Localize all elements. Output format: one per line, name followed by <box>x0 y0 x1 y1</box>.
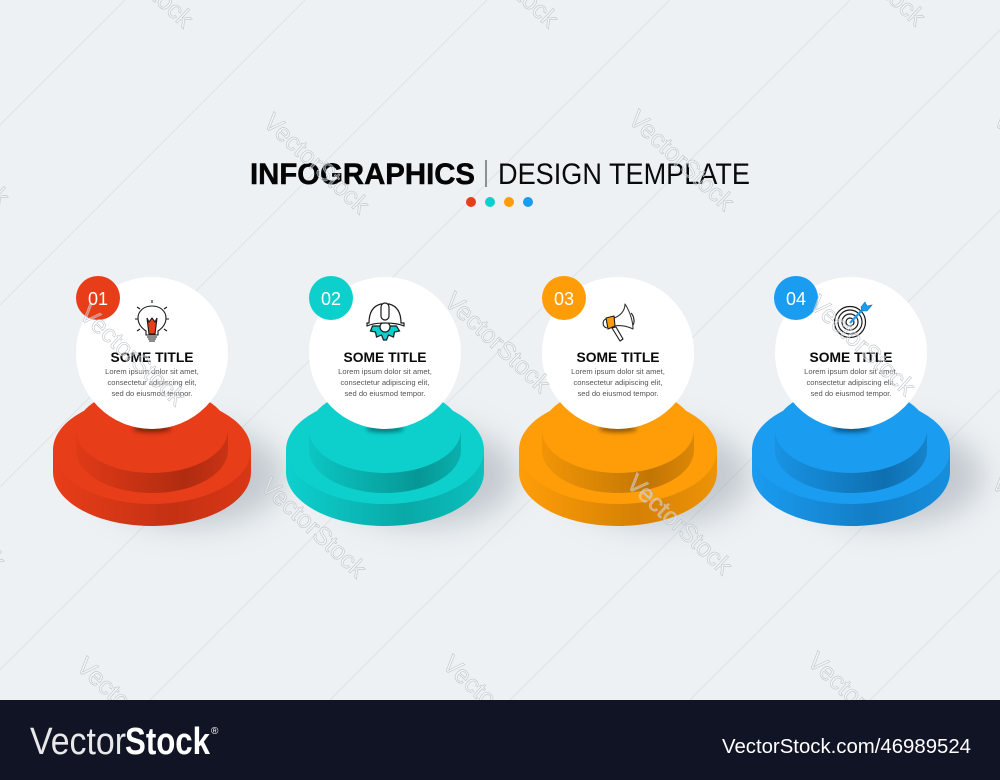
icon: target with arrow <box>834 302 872 338</box>
number badge <box>76 276 120 320</box>
title: INFOGRAPHICS <box>250 158 475 191</box>
number badge <box>309 276 353 320</box>
footer bar <box>0 700 1000 780</box>
number badge: 04 <box>786 289 806 309</box>
footer logo: ® <box>211 726 219 737</box>
number badge: 01 <box>88 289 108 309</box>
body text <box>338 367 432 398</box>
heading: SOME TITLE <box>576 349 660 365</box>
white circle <box>309 277 461 429</box>
body text <box>804 367 898 398</box>
white circle <box>542 277 694 429</box>
podium shadow <box>100 426 284 526</box>
icon: hard hat with gear <box>367 303 404 340</box>
number badge: 03 <box>554 289 574 309</box>
blue podium <box>752 387 950 526</box>
body text: consectetur adipiscing elit, <box>107 378 197 387</box>
red podium <box>53 387 251 526</box>
teal podium <box>286 387 484 526</box>
podium shadow <box>566 426 750 526</box>
number badge <box>774 276 818 320</box>
white circle <box>76 277 228 429</box>
heading: SOME TITLE <box>344 349 426 365</box>
footer logo: Stock <box>125 721 211 763</box>
body text: Lorem ipsum dolor sit amet, <box>804 367 898 376</box>
podium shadow <box>333 426 517 526</box>
title colour dots <box>466 197 533 207</box>
stock watermarks: VectorStock <box>74 300 191 412</box>
stock watermarks: VectorStock <box>623 105 740 217</box>
body text: Lorem ipsum dolor sit amet, <box>105 367 199 376</box>
stock watermarks: VectorStock <box>804 290 921 402</box>
body text: Lorem ipsum dolor sit amet, <box>338 367 432 376</box>
body text: sed do eiusmod tempor. <box>577 389 659 398</box>
orange podium <box>519 387 717 526</box>
white circle <box>775 277 927 429</box>
heading: SOME TITLE <box>110 349 194 365</box>
body text: consectetur adipiscing elit, <box>340 378 430 387</box>
icon: megaphone <box>603 304 634 341</box>
stock watermarks: VectorStock <box>621 469 738 581</box>
panel: step 02 <box>286 276 517 526</box>
footer image id: VectorStock.com/46989524 <box>722 736 971 758</box>
icon: light bulb <box>135 300 169 341</box>
stock watermarks: VectorStock <box>255 472 372 584</box>
body text <box>105 367 199 398</box>
body text: sed do eiusmod tempor. <box>344 389 426 398</box>
panel: step 01 <box>53 276 284 526</box>
title <box>250 158 750 191</box>
body text: sed do eiusmod tempor. <box>111 389 193 398</box>
stock watermarks: VectorStock <box>802 647 919 759</box>
stock watermarks: VectorStock <box>437 650 554 762</box>
body text: consectetur adipiscing elit, <box>573 378 663 387</box>
panel: step 04 <box>752 276 983 526</box>
stock watermarks: VectorStock <box>439 287 556 399</box>
title: DESIGN TEMPLATE <box>498 158 750 191</box>
stock watermarks: VectorStock <box>258 108 375 220</box>
body text: consectetur adipiscing elit, <box>806 378 896 387</box>
body text <box>571 367 665 398</box>
number badge <box>542 276 586 320</box>
footer logo: Vector <box>30 721 126 763</box>
stock watermarks: VectorStock <box>71 652 188 764</box>
footer logo <box>30 721 219 763</box>
body text: sed do eiusmod tempor. <box>810 389 892 398</box>
heading: SOME TITLE <box>810 349 892 365</box>
number badge: 02 <box>321 289 341 309</box>
panel: step 03 <box>519 276 750 526</box>
body text: Lorem ipsum dolor sit amet, <box>571 367 665 376</box>
podium shadow <box>799 426 983 526</box>
